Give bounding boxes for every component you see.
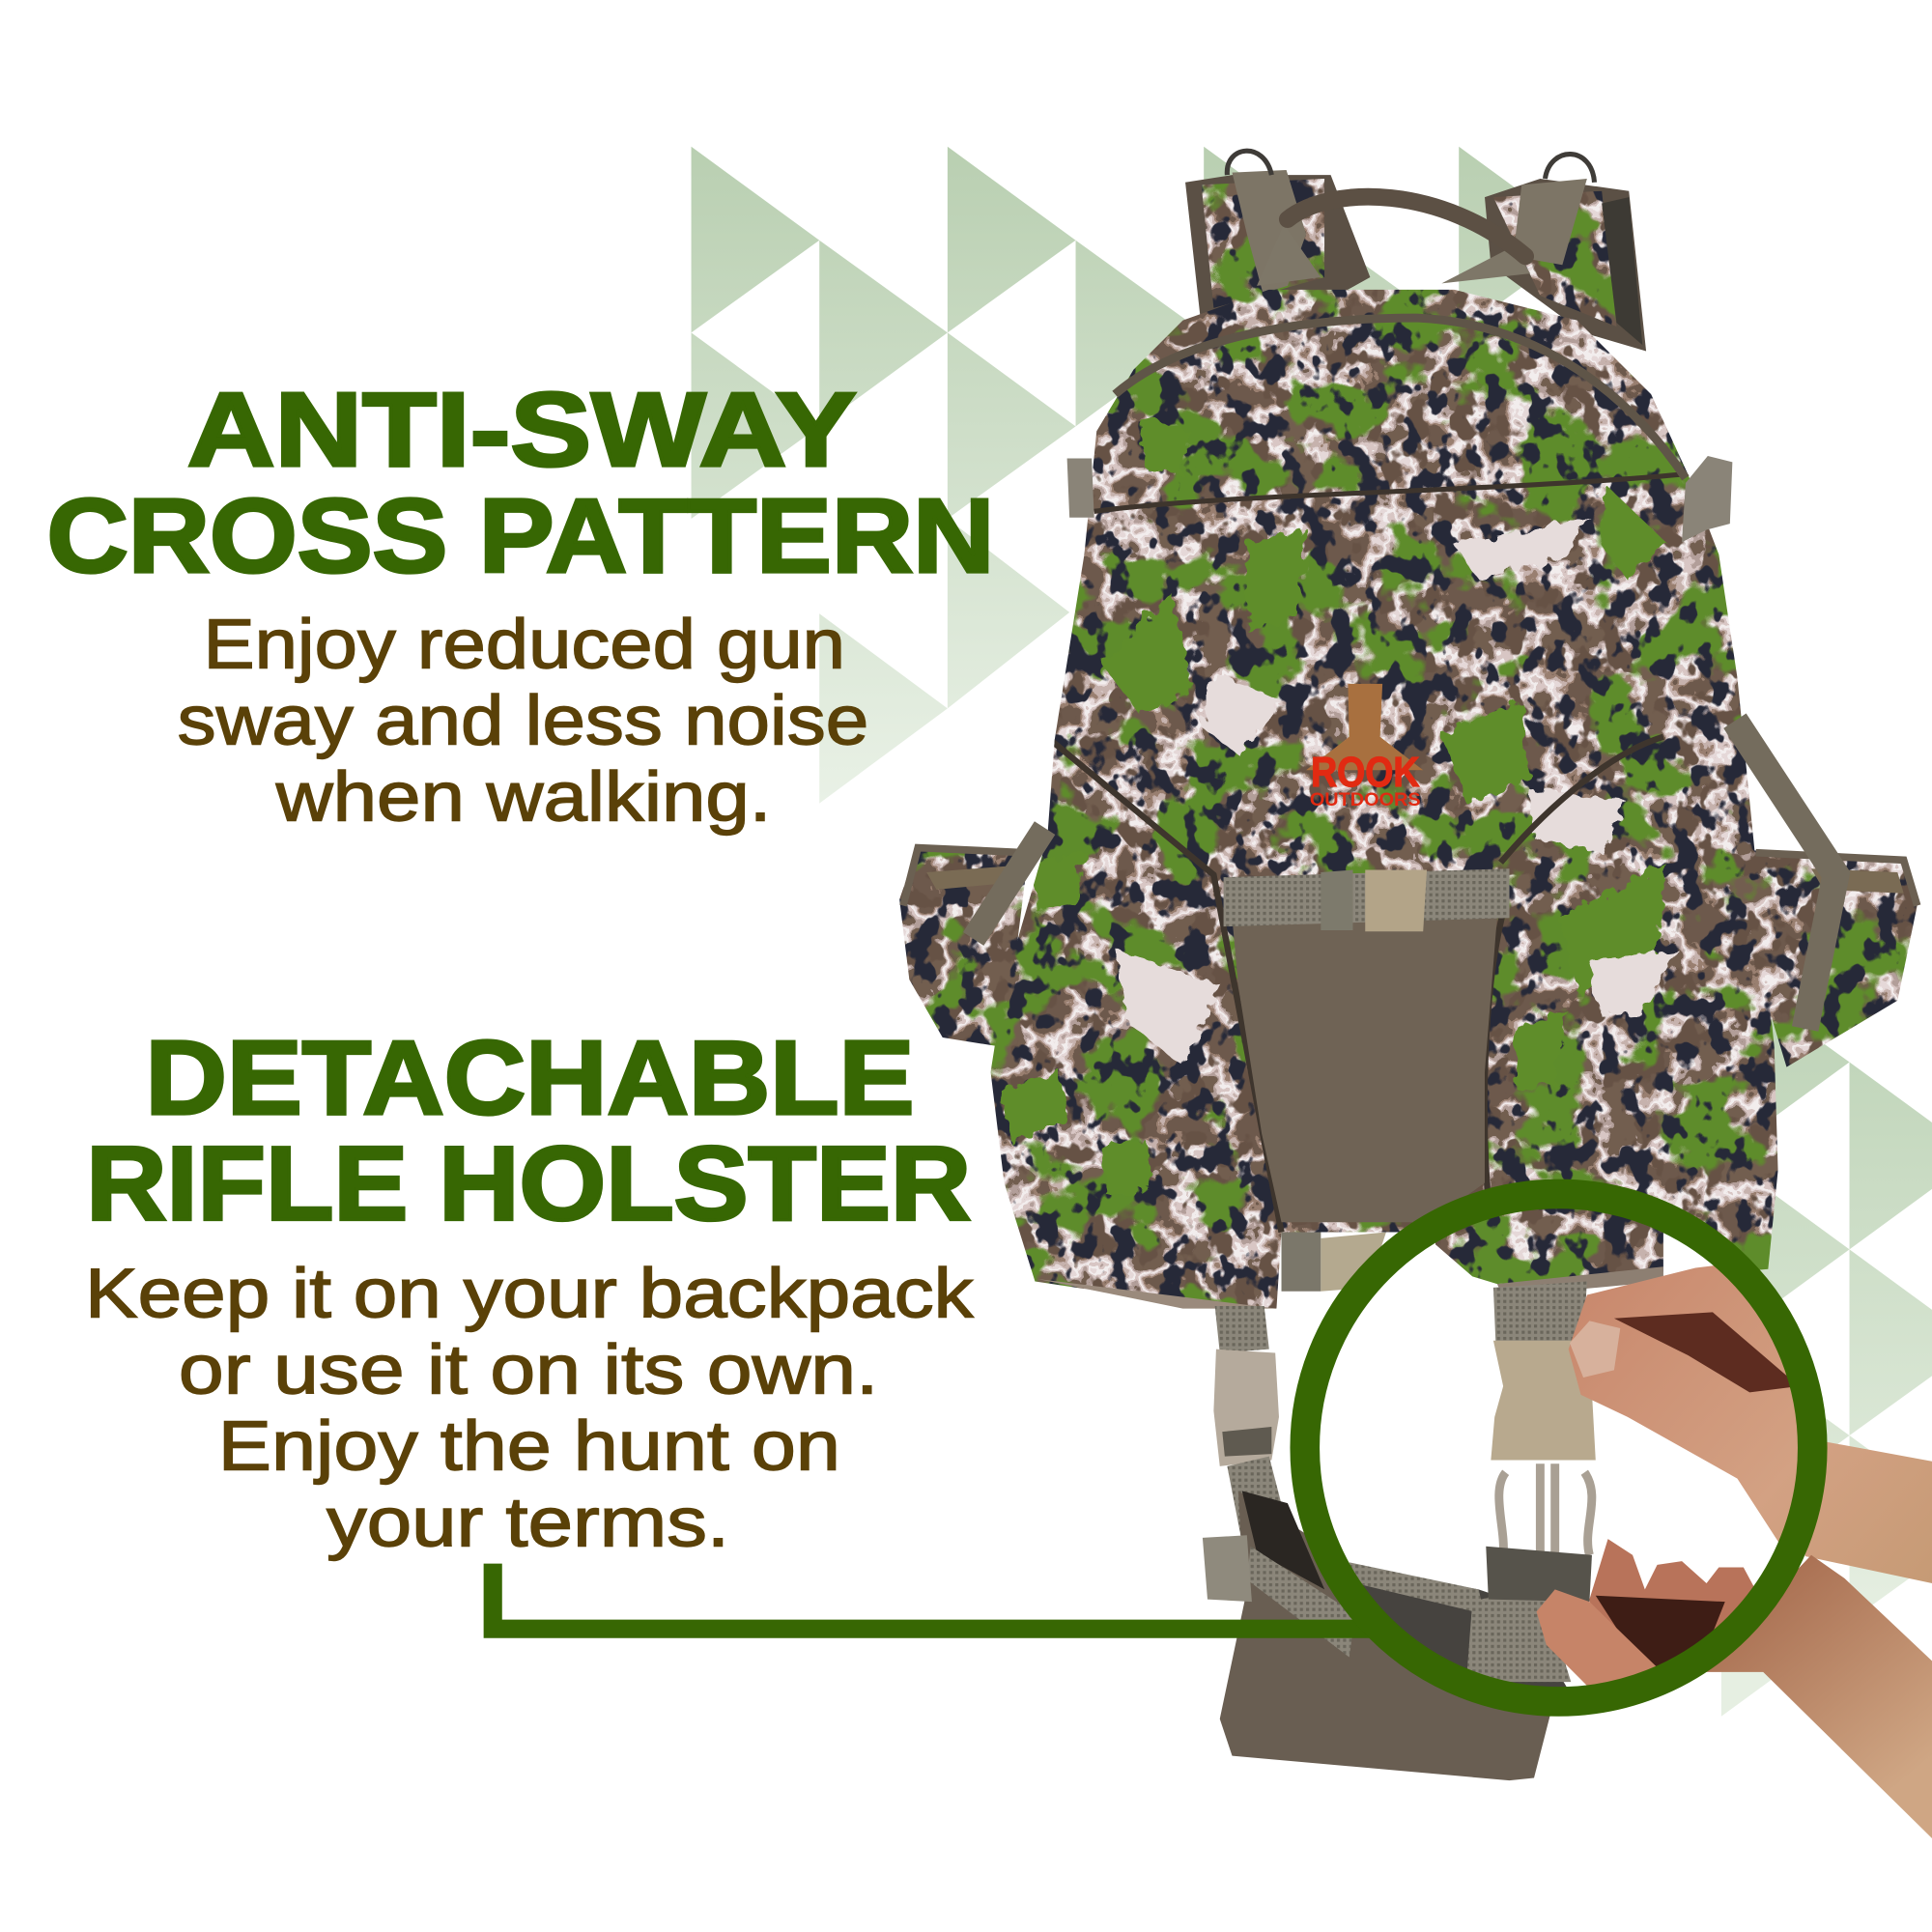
female buckle	[1491, 1341, 1597, 1460]
text block: anti-sway description: Enjoy reduced gun	[203, 605, 845, 683]
logo on backpack	[1306, 684, 1423, 810]
logo on backpack: OUTDOORS	[1310, 790, 1421, 810]
heading: anti-sway cross pattern: ANTI-SWAY	[187, 371, 856, 488]
rifle holster pouch	[1203, 1491, 1559, 1780]
decorative triangles: upper group	[692, 147, 1587, 804]
side straps	[974, 721, 1836, 1029]
side tabs	[1067, 456, 1732, 542]
decorative triangles: lower group	[1721, 970, 1932, 1717]
upper webbing	[1493, 1282, 1587, 1346]
text block: holster description: Keep it on your backpack	[85, 1255, 974, 1333]
text block: anti-sway description: sway and less noise	[178, 681, 868, 759]
text block: holster description: your terms.	[327, 1484, 729, 1562]
lower buckle	[1037, 1233, 1386, 1309]
heading: anti-sway cross pattern: CROSS PATTERN	[46, 477, 994, 594]
text block: anti-sway description	[178, 605, 868, 836]
forearms	[1700, 1439, 1932, 1838]
backpack photo illustration	[887, 151, 1928, 1780]
top handle	[1257, 197, 1530, 286]
heading: detachable rifle holster: RIFLE HOLSTER	[86, 1125, 971, 1242]
lens contents	[1349, 1208, 1798, 1687]
camo light patches	[1115, 518, 1678, 1065]
main camo body	[974, 271, 1799, 1331]
front webbing belt and buckle	[1224, 868, 1509, 931]
lens ring	[1305, 1194, 1812, 1701]
heading: anti-sway cross pattern	[46, 371, 994, 594]
side pockets	[887, 838, 1928, 1078]
text block: holster description	[85, 1255, 974, 1562]
shoulder straps	[1185, 170, 1646, 352]
logo on backpack: ROOK	[1311, 750, 1419, 796]
pouch inside lens	[1362, 1584, 1567, 1687]
lens white interior	[1305, 1194, 1812, 1701]
connector line	[493, 1564, 1374, 1629]
center brown panel	[1233, 918, 1497, 1222]
heading: detachable rifle holster	[86, 1019, 971, 1242]
male buckle	[1499, 1463, 1592, 1555]
seams	[1050, 474, 1682, 1233]
lower hand	[1589, 1539, 1754, 1630]
D-rings	[1227, 151, 1595, 183]
camo green patches	[1001, 419, 1665, 1198]
magnified lens: buckle and hands	[1305, 1177, 1932, 1838]
top zipper	[1115, 318, 1686, 478]
text block: holster description: Enjoy the hunt on	[218, 1407, 840, 1486]
text block: holster description: or use it on its own.	[179, 1331, 878, 1409]
heading: detachable rifle holster: DETACHABLE	[146, 1019, 914, 1136]
text block: anti-sway description: when walking.	[275, 757, 771, 836]
upper hand	[1569, 1265, 1798, 1542]
hanging strap and silver buckle	[1213, 1306, 1288, 1555]
